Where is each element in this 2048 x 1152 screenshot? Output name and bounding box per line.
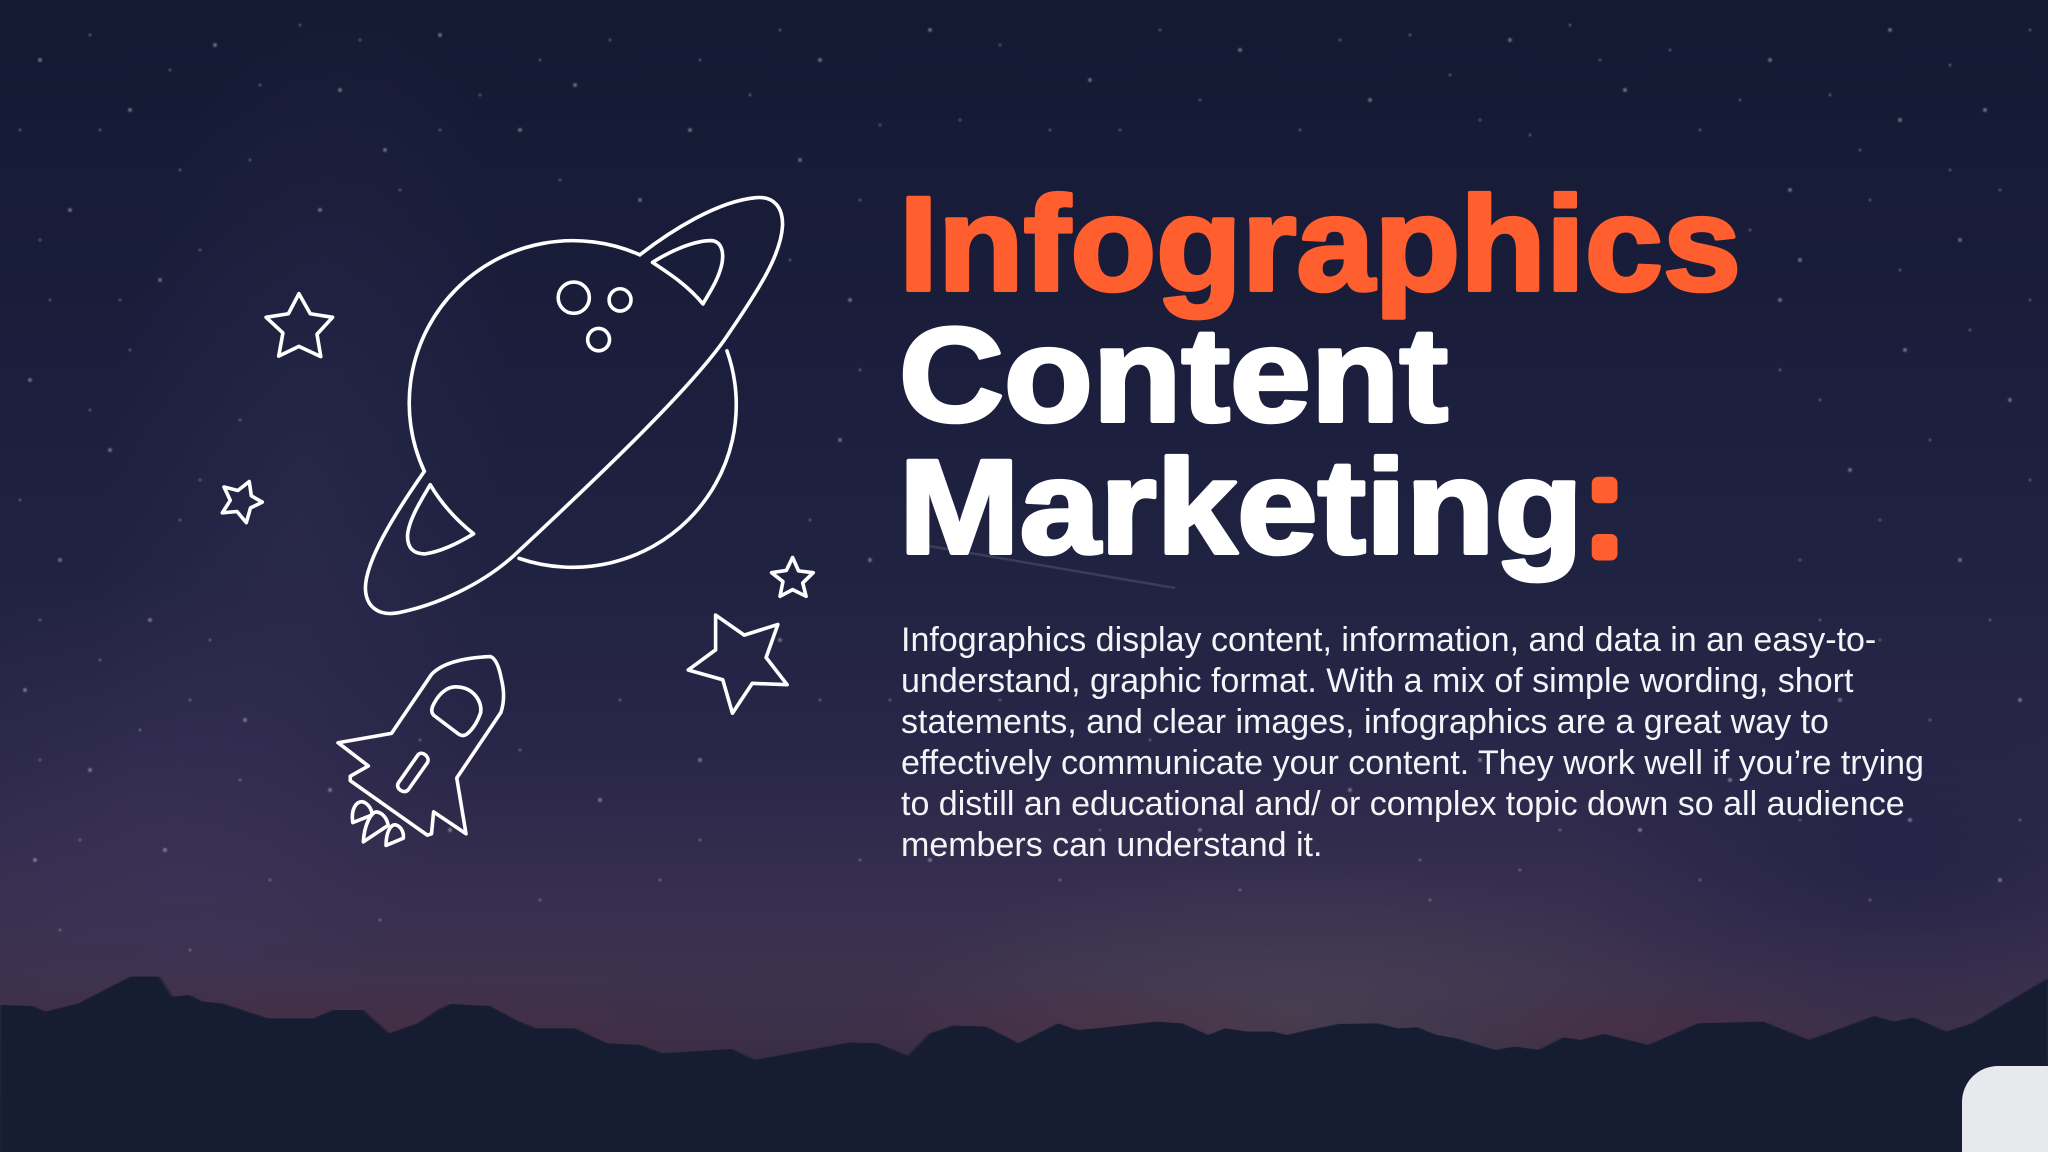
body paragraph [901,621,1924,864]
star top left [266,294,333,357]
shooting star streak [929,546,1175,588]
star small right [772,557,813,596]
planet lower outline [519,351,736,567]
title colon: : [1586,434,1623,583]
rocket body [338,657,504,835]
title line: Marketing: Marketing [899,433,1583,582]
body paragraph: effectively communicate your content. They work well if you’re trying [901,744,1924,782]
rocket flames [352,802,403,845]
planet upper outline [409,241,640,471]
body paragraph: Infographics display content, information, and data in an easy-to- [901,621,1876,659]
body paragraph: members can understand it. [901,826,1322,864]
body paragraph: statements, and clear images, infographics are a great way to [901,703,1829,741]
body paragraph: to distill an educational and/ or complex topic down so all audience [901,785,1905,823]
title line: Content: Content [899,301,1448,450]
craters [558,282,631,351]
corner tab [1962,1066,2048,1152]
star small left [222,482,262,523]
ring inner shape lower [408,485,474,554]
body paragraph: understand, graphic format. With a mix of simple wording, short [901,662,1853,700]
title [899,170,1741,583]
ring inner shape upper [652,241,723,304]
star field [20,25,2030,950]
illustration: planet, stars and rocket [222,198,813,845]
title line: Infographics: Infographics [899,170,1741,319]
planet ring [365,198,783,613]
mountain silhouette [0,977,2048,1152]
star large right [688,615,787,713]
rocket window [432,687,481,735]
rocket slot [398,753,428,792]
